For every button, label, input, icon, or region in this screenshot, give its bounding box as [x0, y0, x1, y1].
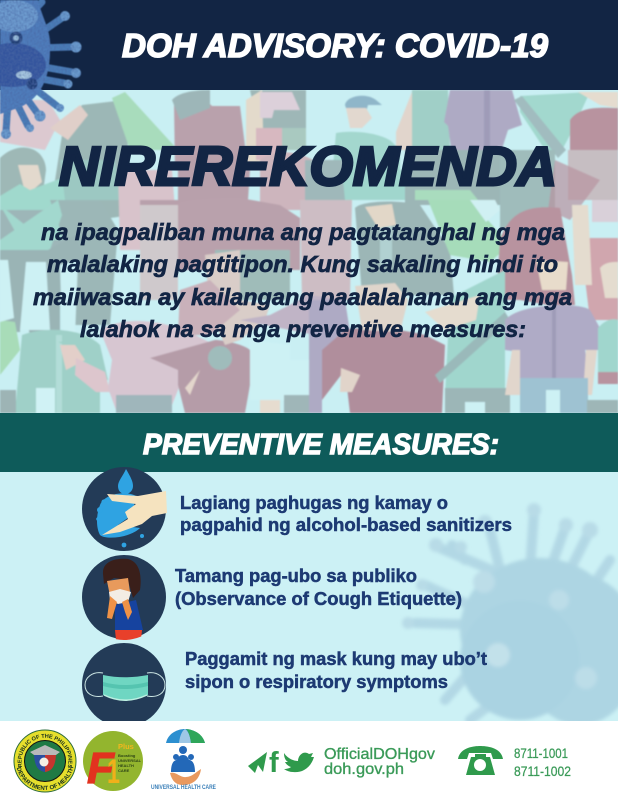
- lower panel background: [0, 472, 618, 721]
- item text: hand washing: Lagiang paghugas ng kamay o: [180, 493, 448, 513]
- item text: mask use: Paggamit ng mask kung may ubo’t: [185, 649, 487, 669]
- intro paragraph: maiiwasan ay kailangang paalalahanan ang mga: [33, 284, 572, 310]
- footer: [14, 721, 571, 793]
- logo: F1 Plus: Plus: [118, 742, 134, 751]
- item text: mask use: sipon o respiratory symptoms: [185, 672, 448, 692]
- item text: hand washing: [180, 493, 512, 535]
- virus illustration, top left: [0, 0, 82, 139]
- preventive measures band: [0, 413, 618, 472]
- social handles: OfficialDOHgov: [324, 746, 435, 763]
- icon: telephone: [458, 746, 503, 775]
- phone numbers: 8711-1001: [514, 745, 568, 761]
- phone numbers: 8711-1002: [514, 763, 571, 779]
- social handles: doh.gov.ph: [324, 761, 404, 778]
- item text: cough etiquette: (Observance of Cough Etiquette): [175, 589, 462, 609]
- mid-left row: [0, 148, 46, 200]
- intro paragraph: na ipagpaliban muna ang pagtatanghal ng mga: [41, 219, 565, 245]
- item text: mask use: [185, 649, 487, 692]
- intro paragraph: lalahok na sa mga preventive measures:: [80, 316, 526, 342]
- icon: face mask: [82, 643, 166, 727]
- large faded virus: [402, 503, 618, 725]
- item text: hand washing: pagpahid ng alcohol-based sanitizers: [180, 515, 512, 535]
- logo: F1 Plus: Boosting: [118, 753, 136, 758]
- center lower: [309, 300, 352, 413]
- logo: F1 Plus: UNIVERSAL: [118, 758, 142, 763]
- header title: DOH ADVISORY: COVID-19: [122, 27, 549, 64]
- icon: social media: f: [269, 747, 279, 779]
- icon: hand washing: [82, 467, 167, 551]
- central back torso: [177, 169, 251, 201]
- logo: F1 Plus: F: [87, 744, 115, 793]
- icon: social media: [248, 747, 314, 779]
- logo: F1 Plus: 1: [107, 753, 120, 791]
- item text: cough etiquette: [175, 566, 462, 609]
- band heading: PREVENTIVE MEASURES:: [143, 429, 499, 461]
- crowd background illustration: [0, 90, 618, 413]
- left lower: [16, 249, 67, 333]
- logo: Universal Health Care: UNIVERSAL HEALTH CARE: [151, 785, 216, 791]
- main heading: NIREREKOMENDA: [59, 135, 557, 197]
- logo: Department of Health seal: [14, 730, 76, 792]
- logo: Universal Health Care: [151, 729, 216, 791]
- intro paragraph: [33, 219, 572, 342]
- intro paragraph: malalaking pagtitipon. Kung sakaling hindi ito: [47, 251, 558, 277]
- social handles: [324, 746, 435, 778]
- mid row figures: [170, 198, 300, 270]
- icon: child coughing: [82, 555, 166, 640]
- logo: Department of Health seal: DEPARTMENT OF HEALTH: [16, 766, 74, 790]
- logo: F1 Plus: HEALTH: [118, 763, 134, 768]
- header bar: [0, 0, 618, 90]
- item text: cough etiquette: Tamang pag-ubo sa publiko: [175, 566, 417, 586]
- logo: F1 Plus: CARE: [118, 768, 130, 773]
- logo: F1 Plus: [83, 731, 143, 793]
- logo: Department of Health seal: REPUBLIC OF THE PHILIPPINES: [18, 734, 72, 768]
- phone numbers: [514, 745, 571, 779]
- back row: [0, 100, 60, 150]
